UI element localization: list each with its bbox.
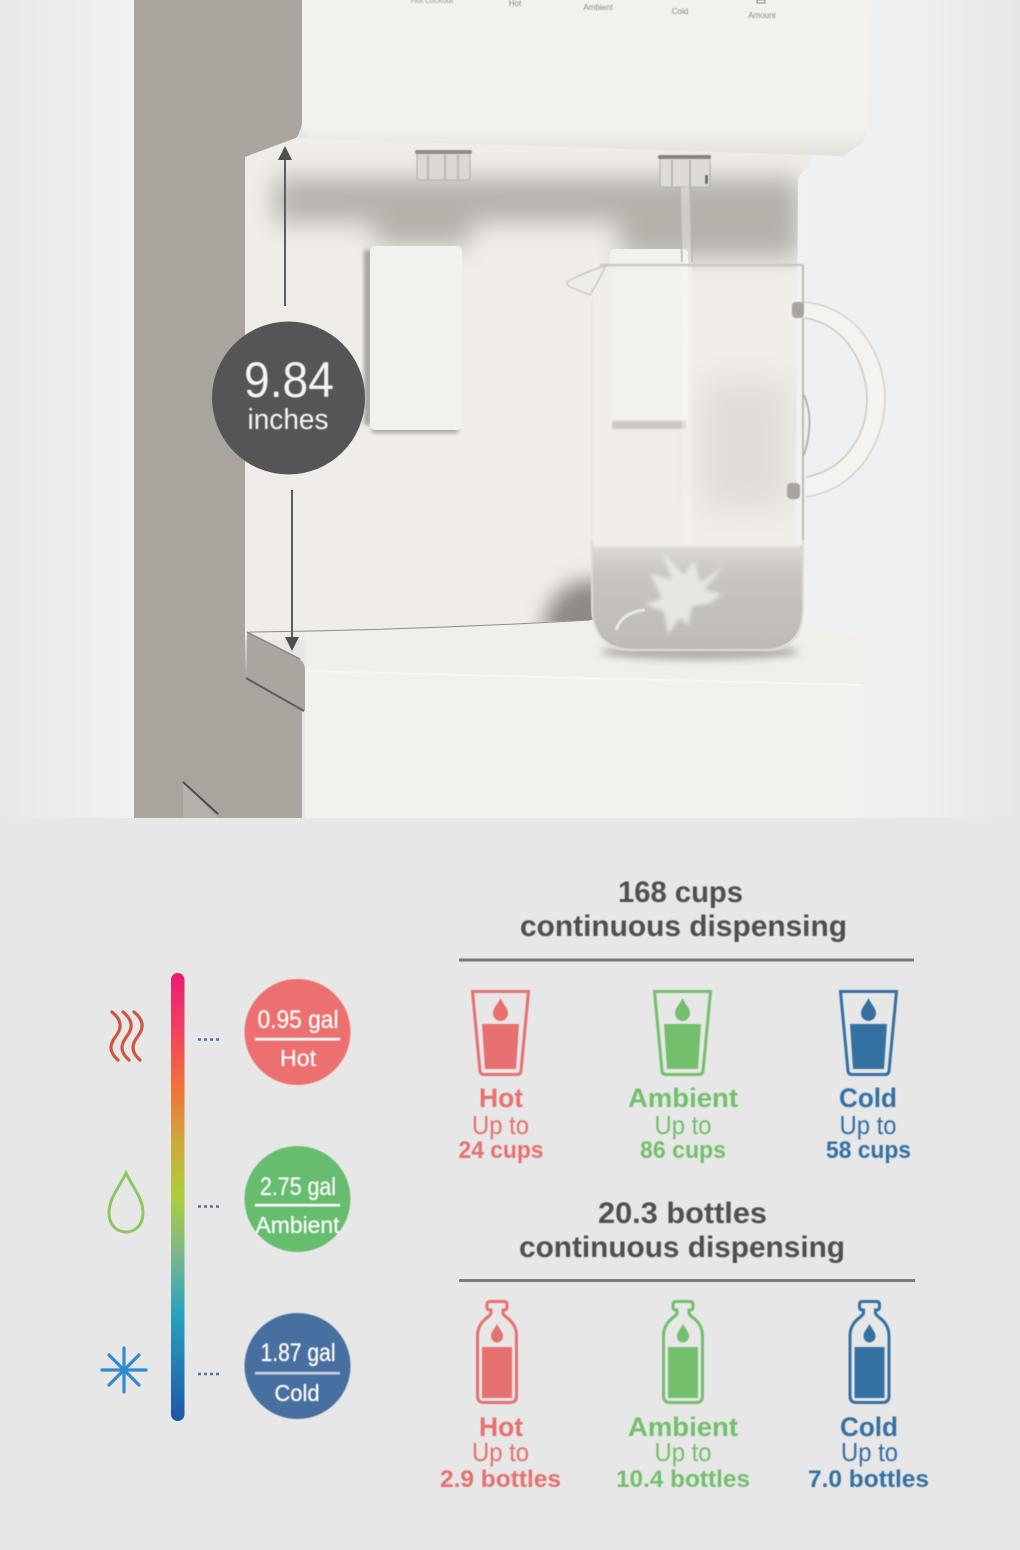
heading: bottles: continuous dispensing: [519, 1231, 845, 1264]
capacity badge: cold: 1.87 gal: [260, 1339, 336, 1367]
dimension badge: [212, 322, 365, 474]
label: hot bottles: Hot: [479, 1412, 523, 1442]
label: ambient bottles: [616, 1412, 750, 1493]
capacity badge: ambient: 2.75 gal: [260, 1173, 336, 1201]
capacity badge: cold: Cold: [274, 1380, 320, 1406]
dotted connector: cold: [198, 1373, 222, 1375]
label: cold cups: Cold: [839, 1083, 897, 1113]
label: ambient cups: Up to: [654, 1110, 712, 1140]
label: hot bottles: Up to: [472, 1437, 529, 1467]
dotted connector: ambient: [198, 1205, 222, 1208]
dimension badge: 9.84: [244, 352, 334, 408]
capacity badge: hot: [244, 979, 350, 1085]
heading: cups: continuous dispensing: [520, 910, 847, 943]
dimension badge: inches: [248, 404, 328, 436]
temperature gradient bar: [171, 973, 184, 1421]
icon: hot bottle: [478, 1302, 516, 1402]
label: cold cups: Up to: [840, 1110, 896, 1140]
label: cold bottles: Up to: [841, 1437, 898, 1467]
icon: snowflake: [102, 1348, 146, 1392]
icon: cold bottle: [850, 1302, 889, 1402]
dimension arrow: up: [278, 146, 292, 306]
label: cold cups: 58 cups: [826, 1137, 911, 1164]
capacity badge: ambient: [244, 1146, 350, 1252]
label: ambient cups: Ambient: [628, 1083, 738, 1113]
icon: heat waves: [111, 1012, 142, 1060]
capacity badge: hot: Hot: [280, 1045, 317, 1071]
label: hot cups: [458, 1083, 544, 1164]
label: ambient bottles: Ambient: [628, 1412, 738, 1442]
label: ambient cups: [628, 1083, 738, 1164]
filter panel left: [370, 246, 462, 430]
label: hot cups: Up to: [472, 1110, 529, 1140]
label: hot cups: Hot: [479, 1083, 523, 1113]
right nozzle: [658, 155, 711, 187]
heading: cups: 168 cups: [618, 876, 743, 909]
dimension arrow: down: [285, 490, 299, 651]
label: hot bottles: [440, 1412, 561, 1493]
label: cold bottles: Cold: [840, 1412, 898, 1442]
label: ambient bottles: 10.4 bottles: [616, 1466, 750, 1493]
label: hot cups: 24 cups: [458, 1137, 544, 1164]
dispenser base: [183, 620, 863, 818]
label: cold bottles: [808, 1412, 929, 1493]
icon: cold glass: [840, 992, 896, 1074]
dispensing recess: [240, 130, 810, 676]
left nozzle: [415, 150, 472, 180]
dotted connector: hot: [198, 1038, 222, 1041]
upper dispenser front with control labels: Cold: [672, 7, 688, 16]
capacity badge: cold: [244, 1313, 350, 1419]
label: ambient bottles: Up to: [654, 1437, 712, 1467]
icon: hot glass: [472, 992, 528, 1074]
filter panel right: [610, 249, 688, 274]
label: hot bottles: 2.9 bottles: [440, 1466, 561, 1493]
upper dispenser front with control labels: [302, 0, 870, 156]
icon: ambient bottle: [664, 1302, 702, 1402]
label: cold bottles: 7.0 bottles: [808, 1466, 929, 1493]
heading: cups: [520, 876, 847, 943]
capacity badge: ambient: Ambient: [256, 1212, 340, 1238]
product photo: water dispenser: [100, 0, 933, 818]
capacity badge: hot: 0.95 gal: [258, 1006, 338, 1034]
upper dispenser front with control labels: Ambient: [583, 3, 613, 12]
label: ambient cups: 86 cups: [640, 1137, 726, 1164]
dispenser side panel: [134, 0, 302, 818]
icon: water drop outline: [109, 1173, 143, 1232]
glass pitcher: [567, 265, 885, 650]
upper dispenser front with control labels: Amount: [748, 11, 777, 20]
water stream: [680, 187, 693, 430]
heading: bottles: [519, 1197, 845, 1264]
icon: ambient glass: [654, 992, 710, 1074]
label: cold cups: [826, 1083, 911, 1164]
heading: bottles: 20.3 bottles: [598, 1197, 767, 1230]
